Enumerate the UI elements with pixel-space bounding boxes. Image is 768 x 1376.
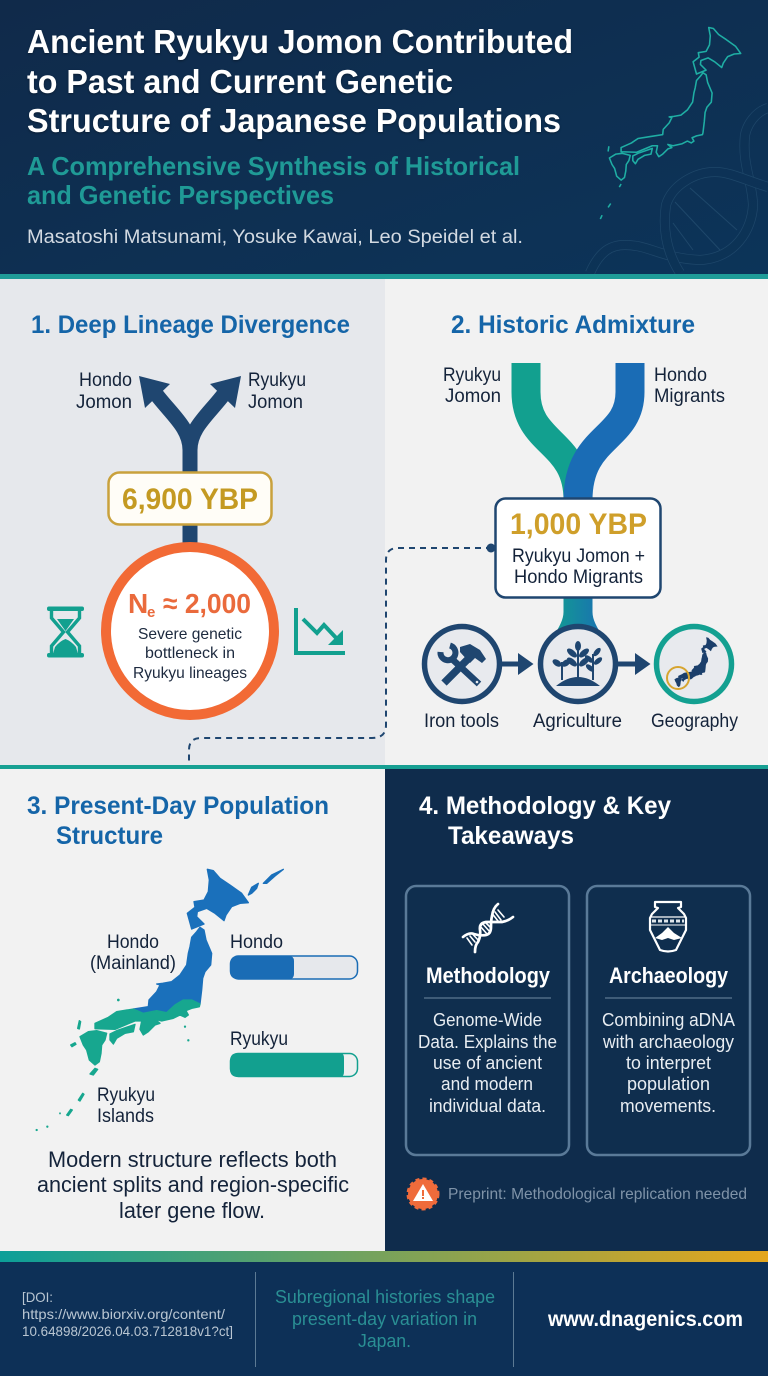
step labels: Geography bbox=[651, 711, 738, 732]
bottleneck circle: e bbox=[147, 604, 155, 621]
stream labels: Ryukyu bbox=[443, 365, 501, 386]
heading 4 bbox=[419, 792, 671, 850]
DOI citation bbox=[22, 1289, 233, 1339]
DOI citation: 10.64898/2026.04.03.712818v1?ct] bbox=[22, 1323, 233, 1339]
step labels: Iron tools bbox=[424, 711, 499, 732]
card: archaeology: with archaeology bbox=[602, 1032, 734, 1052]
merged stream below the box bbox=[548, 598, 608, 645]
footer takeaway: present-day variation in bbox=[292, 1309, 477, 1329]
Japan map bbox=[36, 869, 283, 1130]
date box 1,000 YBP bbox=[496, 498, 660, 598]
dashed connector bbox=[189, 544, 496, 767]
Hondo ancestry bar bbox=[230, 932, 358, 979]
authors: Masatoshi Matsunami, Yosuke Kawai, Leo Speidel et al. bbox=[27, 227, 523, 248]
card: archaeology: Combining aDNA bbox=[602, 1010, 735, 1030]
card: methodology: use of ancient bbox=[433, 1053, 542, 1073]
card: archaeology bbox=[587, 886, 750, 1155]
date box 1,000 YBP: 1,000 YBP bbox=[510, 508, 647, 541]
footer takeaway: Subregional histories shape bbox=[275, 1287, 495, 1307]
card: methodology: Data. Explains the bbox=[418, 1032, 557, 1052]
map labels: Ryukyu bbox=[97, 1085, 155, 1106]
caption bbox=[37, 1147, 349, 1223]
branching arrows bbox=[139, 376, 241, 545]
bottleneck circle: bottleneck in bbox=[145, 645, 235, 662]
heading 3 bbox=[27, 792, 329, 850]
merging streams bbox=[526, 363, 630, 500]
middle accent bar bbox=[0, 765, 768, 769]
branch labels: Hondo bbox=[79, 370, 132, 391]
map labels bbox=[90, 932, 176, 1127]
Hondo ancestry bar: Hondo bbox=[230, 932, 283, 953]
branch labels: Jomon bbox=[76, 392, 132, 413]
branch labels: Ryukyu bbox=[248, 370, 306, 391]
heading 3: Structure bbox=[56, 822, 163, 850]
panel 1: deep lineage divergence bbox=[0, 279, 385, 765]
subtitle: A Comprehensive Synthesis of Historical bbox=[27, 151, 520, 181]
Ryukyu ancestry bar: Ryukyu bbox=[230, 1029, 288, 1050]
panel 2: historic admixture bbox=[385, 279, 768, 765]
stream labels bbox=[443, 365, 725, 407]
heading 1: 1. Deep Lineage Divergence bbox=[31, 311, 350, 339]
icon: geography bbox=[656, 626, 732, 702]
icon: DNA bbox=[463, 904, 513, 952]
footer bbox=[0, 1262, 768, 1376]
branch labels: Jomon bbox=[248, 392, 303, 413]
heading 4: Takeaways bbox=[448, 822, 574, 850]
flow arrows bbox=[500, 653, 650, 675]
footer gradient bar bbox=[0, 1251, 768, 1262]
stream labels: Hondo bbox=[654, 365, 707, 386]
caption: Modern structure reflects both bbox=[48, 1147, 337, 1172]
caption: later gene flow. bbox=[119, 1198, 265, 1223]
DOI citation: [DOI: bbox=[22, 1289, 53, 1305]
bottleneck circle: ≈ 2,000 bbox=[163, 588, 251, 619]
title: Structure of Japanese Populations bbox=[27, 102, 561, 139]
icon: pottery vase bbox=[650, 902, 686, 952]
map labels: Islands bbox=[97, 1106, 154, 1127]
date box 1,000 YBP: Hondo Migrants bbox=[514, 567, 643, 588]
title: to Past and Current Genetic bbox=[27, 63, 453, 100]
DNA helix watermark bbox=[590, 108, 768, 273]
preprint warning: Preprint: Methodological replication needed bbox=[448, 1186, 747, 1203]
card: methodology: Methodology bbox=[426, 963, 551, 988]
preprint warning bbox=[408, 1179, 747, 1209]
title: Ancient Ryukyu Jomon Contributed bbox=[27, 23, 573, 60]
icon: iron tools bbox=[424, 626, 500, 702]
footer takeaway: Japan. bbox=[358, 1331, 411, 1351]
card: archaeology: Archaeology bbox=[609, 963, 729, 988]
step labels bbox=[424, 711, 738, 732]
subtitle bbox=[27, 151, 520, 210]
subtitle: and Genetic Perspectives bbox=[27, 180, 334, 210]
card: methodology bbox=[406, 886, 569, 1155]
bottleneck circle: Severe genetic bbox=[138, 626, 242, 643]
title bbox=[27, 23, 573, 139]
footer takeaway bbox=[275, 1287, 495, 1351]
icon: hourglass bbox=[47, 606, 84, 658]
card: methodology: Genome-Wide bbox=[433, 1010, 542, 1030]
card: archaeology: to interpret bbox=[626, 1053, 711, 1073]
header banner bbox=[0, 0, 768, 274]
date box 1,000 YBP: Ryukyu Jomon + bbox=[512, 546, 645, 567]
Japan outline map bbox=[600, 27, 741, 219]
branch labels bbox=[76, 370, 306, 413]
caption: ancient splits and region-specific bbox=[37, 1172, 349, 1197]
heading 4: 4. Methodology & Key bbox=[419, 792, 671, 820]
bottleneck circle: Ryukyu lineages bbox=[133, 665, 247, 682]
date badge 6,900 YBP bbox=[108, 472, 272, 524]
date badge 6,900 YBP: 6,900 YBP bbox=[122, 483, 258, 516]
card: archaeology: population bbox=[627, 1074, 710, 1094]
Ryukyu ancestry bar bbox=[230, 1029, 358, 1077]
bottleneck circle bbox=[106, 547, 274, 715]
card: methodology: and modern bbox=[441, 1074, 533, 1094]
icon: declining chart bbox=[296, 608, 345, 653]
header accent bar bbox=[0, 274, 768, 279]
card: methodology: individual data. bbox=[429, 1096, 546, 1116]
map labels: (Mainland) bbox=[90, 953, 176, 974]
panel 3: present-day population structure bbox=[0, 769, 385, 1251]
stream labels: Migrants bbox=[654, 386, 725, 407]
website: www.dnagenics.com bbox=[547, 1308, 743, 1331]
heading 2: 2. Historic Admixture bbox=[451, 311, 695, 339]
bottleneck circle: N bbox=[128, 588, 148, 619]
map labels: Hondo bbox=[107, 932, 159, 953]
step labels: Agriculture bbox=[533, 711, 622, 732]
heading 3: 3. Present-Day Population bbox=[27, 792, 329, 820]
panel 4: methodology and key takeaways bbox=[385, 769, 768, 1251]
card: archaeology: movements. bbox=[620, 1096, 716, 1116]
icon: agriculture bbox=[540, 626, 616, 702]
DOI citation: https://www.biorxiv.org/content/ bbox=[22, 1306, 225, 1322]
stream labels: Jomon bbox=[445, 386, 501, 407]
